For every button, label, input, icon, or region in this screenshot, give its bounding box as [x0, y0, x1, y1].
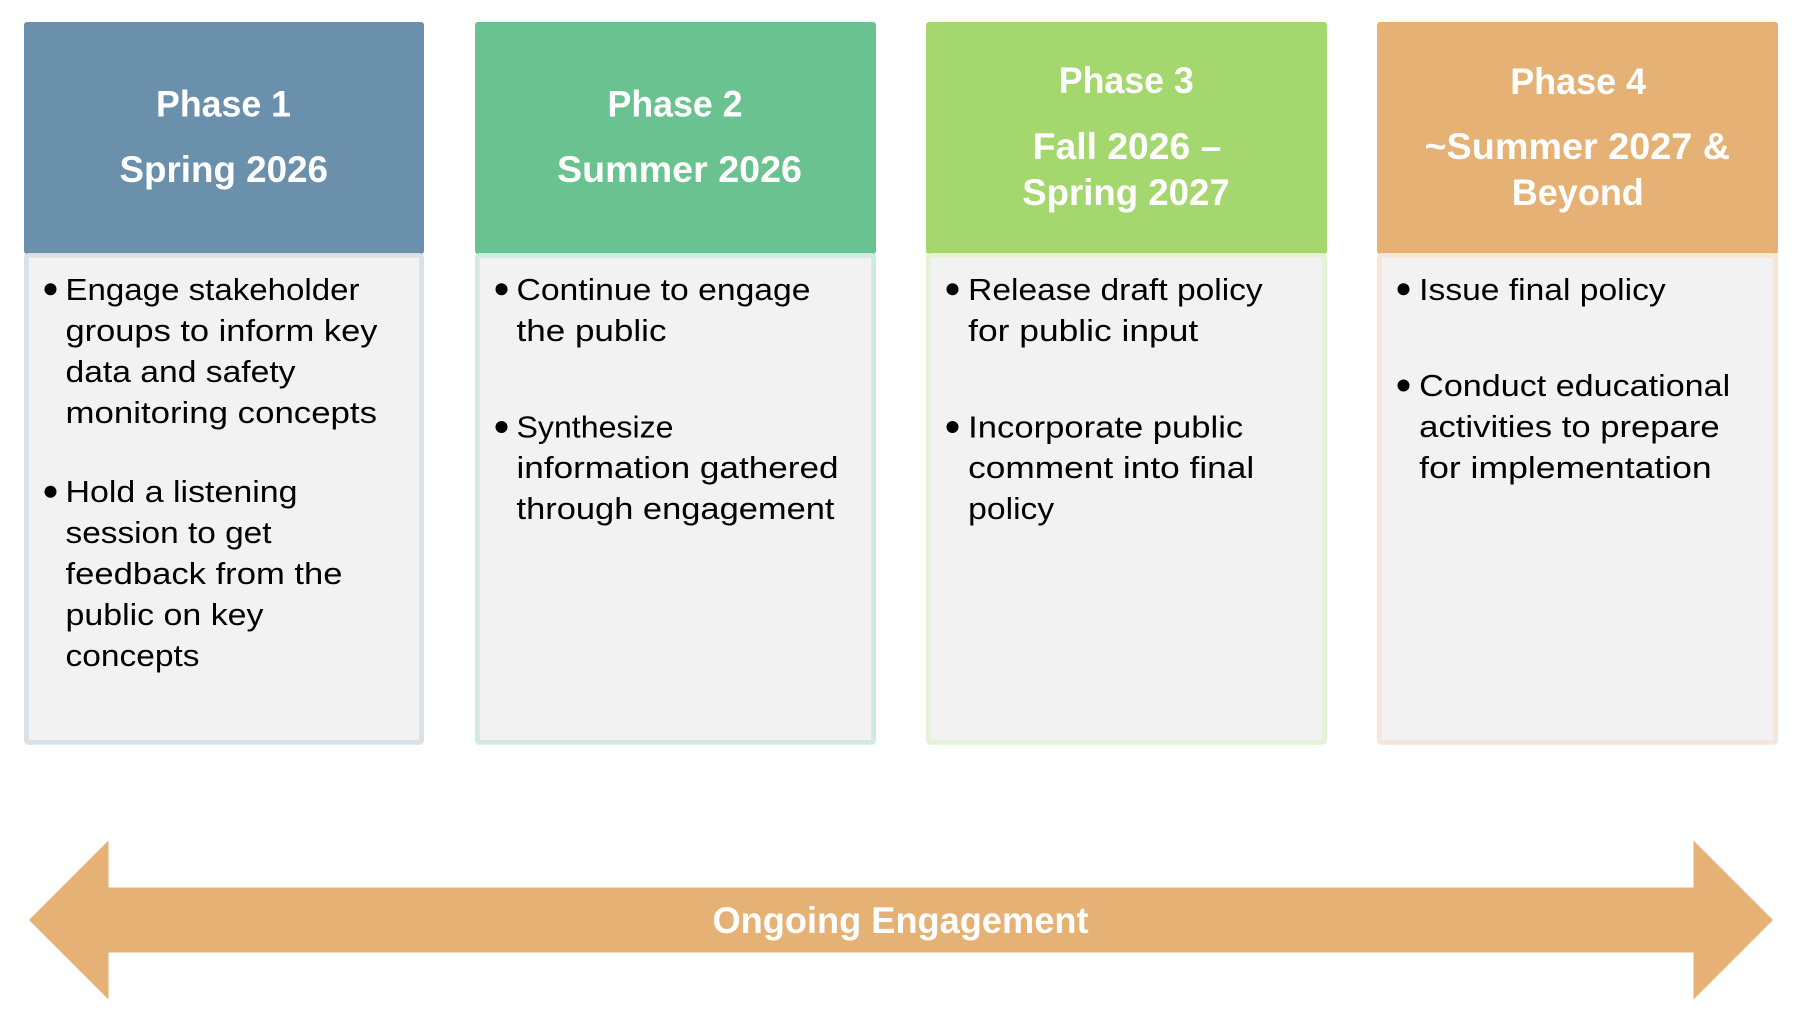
phase 1 body: groups to inform key: [66, 313, 378, 348]
phase 2 body: the public: [516, 313, 666, 348]
phase 4 heading: [1377, 22, 1778, 254]
phase 3 heading: [926, 22, 1327, 254]
phase 2 heading: Phase 2: [608, 84, 742, 124]
panel: phase 4: [1377, 22, 1778, 742]
phase 3 heading: Phase 3: [1059, 60, 1194, 101]
phase 1 body: monitoring concepts: [66, 395, 377, 430]
phase 2 body: Synthesize: [516, 410, 674, 444]
phase 3 body: Incorporate public: [968, 410, 1243, 444]
phase 1 body: session to get: [66, 515, 272, 550]
phase 4 body: activities to prepare: [1419, 409, 1720, 444]
phase 1 body: concepts: [66, 638, 200, 673]
phase 4 body: Issue final policy: [1419, 272, 1666, 307]
phase 1 body: public on key: [66, 597, 264, 632]
phase 3 heading: Fall 2026 –: [1033, 126, 1221, 167]
phase 2 body: [477, 255, 874, 742]
phase 2 body: information gathered: [516, 450, 838, 485]
phase 4 heading: Phase 4: [1510, 61, 1647, 102]
phase 4 heading: ~Summer 2027 &: [1424, 126, 1730, 167]
arrow: ongoing engagement: Ongoing Engagement: [712, 900, 1088, 941]
phase 1 body: feedback from the: [66, 556, 342, 591]
phase 1 body: Engage stakeholder: [66, 272, 360, 307]
panel: phase 1: [24, 22, 424, 742]
phase 1 body: data and safety: [66, 354, 296, 389]
phase 1 heading: Phase 1: [156, 84, 291, 125]
phase 3 body: comment into final: [968, 450, 1254, 485]
phase 1 body: [26, 255, 422, 742]
phase 3 body: Release draft policy: [968, 272, 1263, 307]
phase 2 heading: Summer 2026: [557, 149, 802, 190]
phase 3 body: [928, 255, 1325, 742]
phase 1 body: Hold a listening: [66, 474, 298, 509]
arrow: ongoing engagement: [29, 840, 1773, 1000]
phase 3 heading: Spring 2027: [1022, 172, 1230, 213]
phase 2 heading: [475, 22, 876, 254]
phase 4 body: for implementation: [1419, 450, 1712, 485]
phase 3 body: policy: [968, 491, 1055, 526]
phase 2 body: through engagement: [516, 491, 835, 526]
phase 4 body: [1379, 255, 1776, 742]
phase 1 heading: [24, 22, 424, 254]
panel: phase 3: [926, 22, 1327, 742]
phase 4 body: Conduct educational: [1419, 368, 1730, 403]
phase 1 heading: Spring 2026: [120, 149, 328, 190]
phase 2 body: Continue to engage: [516, 272, 810, 307]
phase 3 body: for public input: [968, 313, 1199, 348]
panel: phase 2: [475, 22, 876, 742]
phase 4 heading: Beyond: [1512, 172, 1644, 213]
